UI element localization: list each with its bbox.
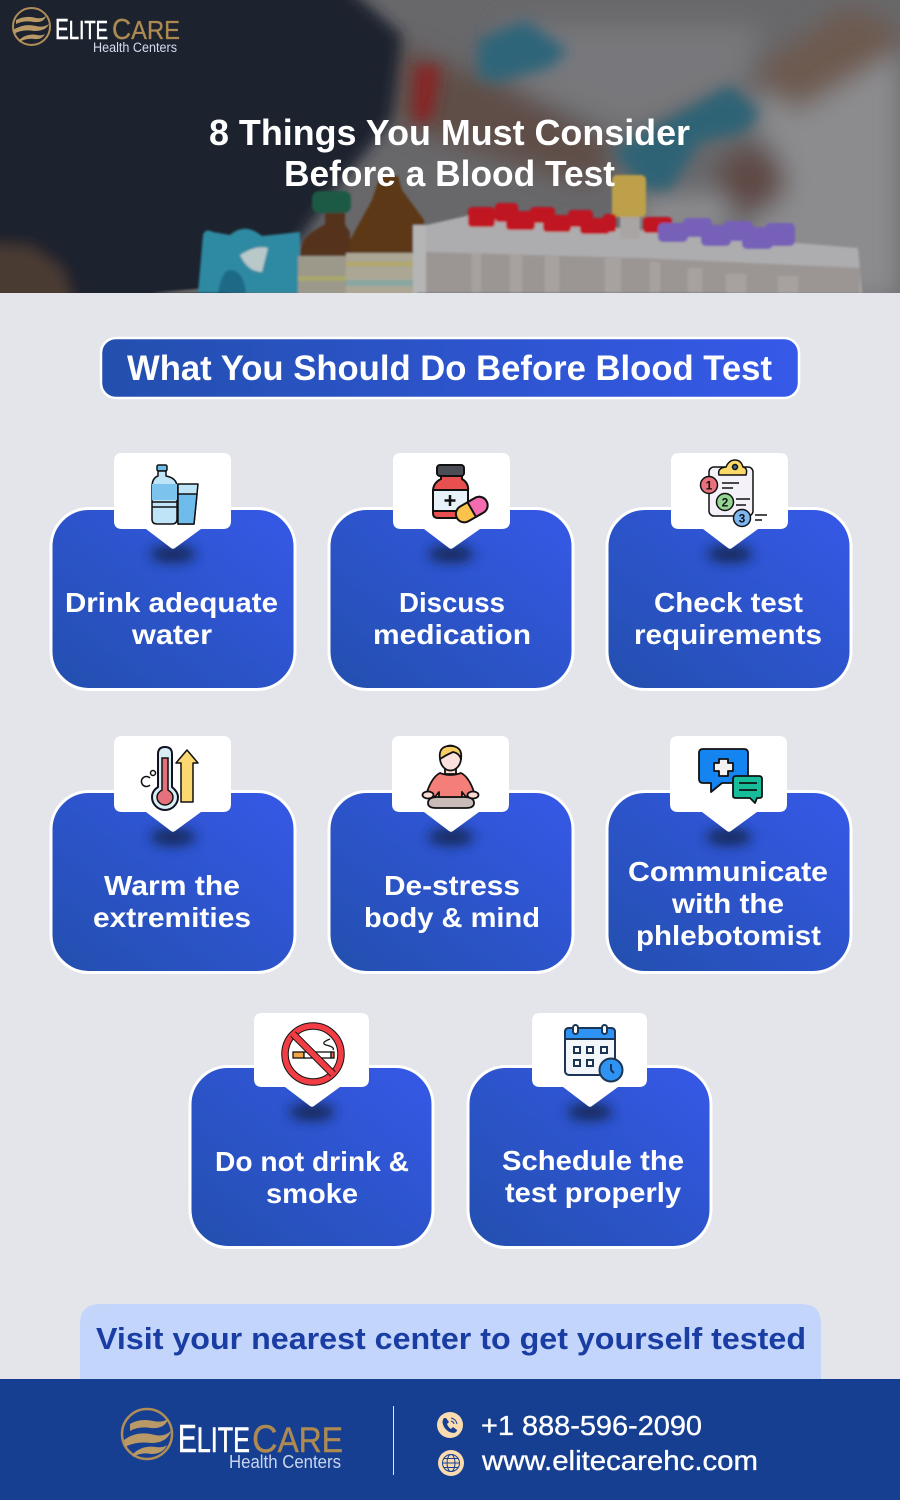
icon: numbered clipboard: 2 — [722, 496, 729, 510]
panel: drink adequate water: water — [131, 619, 212, 650]
logo: Elite Care footer: CARE — [252, 1418, 343, 1461]
logo: Elite Care top: CARE — [112, 14, 180, 46]
icon: no smoking — [285, 1026, 341, 1082]
panel: de-stress body and mind: De-stress — [384, 870, 520, 901]
panel: warm the extremities — [51, 736, 295, 972]
icon: phone — [437, 1412, 463, 1438]
panel: warm the extremities: Warm the — [104, 870, 240, 901]
icon: thermometer with arrow — [141, 747, 198, 810]
panel: schedule the test properly — [468, 1013, 711, 1248]
logo: Elite Care footer — [122, 1409, 343, 1472]
title: Before a Blood Test — [284, 153, 615, 194]
panel: do not drink and smoke: Do not drink & — [215, 1146, 409, 1177]
panel: communicate with the phlebotomist — [607, 736, 851, 972]
logo: Elite Care top: ELITE — [55, 14, 108, 46]
panel: communicate with the phlebotomist: phlebotomist — [636, 920, 821, 951]
panel: de-stress body and mind: body & mind — [364, 902, 540, 933]
panel: check test requirements: requirements — [634, 619, 822, 650]
logo: Elite Care top: Health Centers — [93, 40, 177, 55]
panel: communicate with the phlebotomist: Communicate — [628, 856, 828, 887]
title: 8 Things You Must Consider — [209, 112, 690, 153]
panel: warm the extremities: extremities — [93, 902, 251, 933]
icon: medicine bottle and capsule — [433, 465, 491, 525]
panel: discuss medication — [329, 453, 573, 690]
icon: numbered clipboard — [700, 460, 767, 526]
panel: de-stress body and mind — [329, 736, 573, 972]
icon: calendar with clock — [565, 1025, 622, 1082]
icon: water bottle and glass — [152, 465, 198, 524]
panel: schedule the test properly: Schedule the — [502, 1145, 684, 1176]
panel: do not drink and smoke: smoke — [266, 1178, 358, 1209]
icon: numbered clipboard: 3 — [739, 512, 746, 526]
icon: numbered clipboard: 1 — [706, 478, 713, 492]
icon: chat bubbles with medical cross — [699, 749, 762, 803]
logo: Elite Care footer: Health Centers — [229, 1452, 341, 1472]
icon: meditating person — [422, 746, 478, 808]
panel: discuss medication: medication — [373, 619, 531, 650]
panel: do not drink and smoke — [190, 1013, 433, 1248]
icon: globe — [438, 1450, 464, 1476]
contact text: www.elitecarehc.com — [481, 1445, 758, 1476]
contact text — [481, 1410, 758, 1476]
panel: drink adequate water — [51, 453, 295, 690]
title — [209, 112, 690, 194]
logo: Elite Care footer: ELITE — [178, 1418, 250, 1461]
panel: drink adequate water: Drink adequate — [65, 587, 278, 618]
panel: discuss medication: Discuss — [399, 587, 505, 618]
section heading banner — [101, 338, 799, 398]
logo: Elite Care top — [13, 8, 180, 55]
call to action — [80, 1304, 821, 1379]
section heading banner: What You Should Do Before Blood Test — [127, 349, 772, 388]
panel: schedule the test properly: test properly — [505, 1177, 681, 1208]
panel: check test requirements: Check test — [654, 587, 803, 618]
hero photo: blood test tubes — [0, 0, 900, 320]
panel: check test requirements — [607, 453, 851, 690]
call to action: Visit your nearest center to get yourself tested — [96, 1321, 806, 1356]
panel: communicate with the phlebotomist: with the — [671, 888, 784, 919]
contact text: +1 888-596-2090 — [481, 1410, 702, 1441]
footer — [0, 1379, 900, 1500]
